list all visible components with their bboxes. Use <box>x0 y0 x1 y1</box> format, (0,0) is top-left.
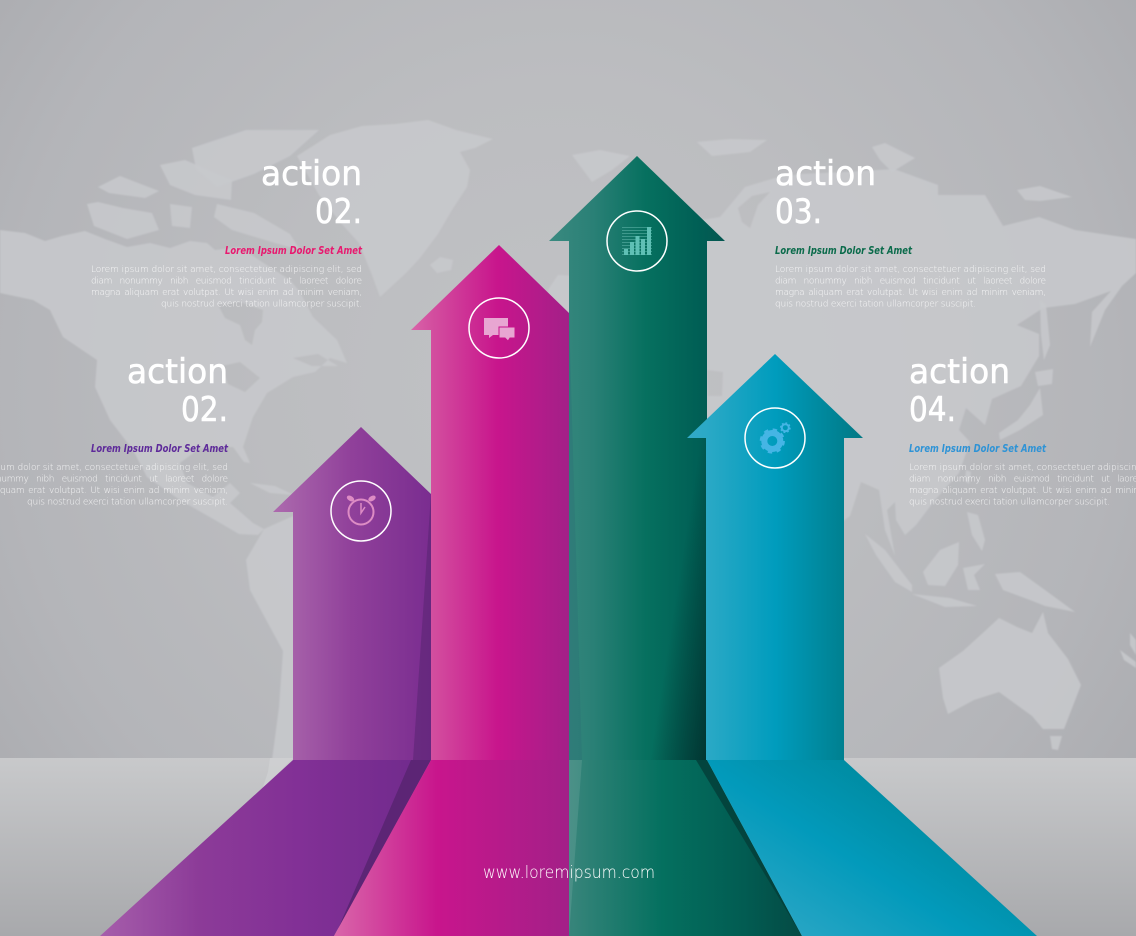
subtitle: Lorem Ipsum Dolor Set Amet <box>909 443 1047 455</box>
heading: action <box>261 154 362 193</box>
icon: alarm clock in circle <box>331 481 391 541</box>
Borneo <box>923 542 959 586</box>
text block: action 02 lower <box>0 352 229 508</box>
Sulawesi <box>963 564 985 590</box>
Philippines <box>967 512 985 551</box>
body text: diam nonummy nibh euismod tincidunt ut laoreet dolore <box>91 276 362 286</box>
teal left shade on wall <box>569 313 582 760</box>
body text: quis nostrud exerci tation ullamcorper suscipit. <box>909 498 1110 508</box>
arrow 2: magenta <box>334 245 569 936</box>
body text: Lorem ipsum dolor sit amet, consectetuer adipiscing elit, sed <box>91 265 362 275</box>
purple shadow on floor <box>335 760 431 936</box>
subtitle: Lorem Ipsum Dolor Set Amet <box>775 245 913 257</box>
Victoria Island <box>87 202 159 239</box>
text block: action 04 <box>909 352 1136 508</box>
body text: quis nostrud exerci tation ullamcorper suscipit. <box>161 300 362 310</box>
arrow 3: teal <box>549 156 802 936</box>
icon: chat bubbles in circle <box>469 298 529 358</box>
Taiwan <box>965 470 971 484</box>
magenta shaft and head <box>411 245 569 760</box>
Europe fragment <box>548 275 640 500</box>
number: 02. <box>315 192 362 231</box>
body text: diam nonummy nibh euismod tincidunt ut laoreet dolore <box>775 276 1046 286</box>
subtitle: Lorem Ipsum Dolor Set Amet <box>225 245 363 257</box>
body text <box>0 463 228 508</box>
text block: action 02 upper <box>91 154 363 310</box>
Java <box>912 594 977 607</box>
body text <box>775 265 1046 310</box>
Svalbard <box>572 150 630 182</box>
magenta floor band <box>334 760 569 936</box>
purple floor band <box>100 760 431 936</box>
Sakhalin and Kuril islands <box>1040 300 1050 360</box>
heading: action <box>909 352 1010 391</box>
Tasmania <box>1050 736 1062 750</box>
arrow 4: blue <box>687 354 1037 936</box>
body text <box>91 265 362 310</box>
teal right shadow on floor <box>696 760 802 936</box>
teal shaft and head <box>549 156 725 760</box>
Arctic islands <box>160 160 232 228</box>
Arctic archipelagos <box>697 139 1072 201</box>
text block: action 03 <box>775 154 1046 310</box>
world map <box>0 120 1136 760</box>
Banks Island <box>98 176 159 198</box>
Sumatra <box>865 534 912 592</box>
icon: gears in circle <box>745 408 805 468</box>
icon: bar chart in circle <box>607 211 667 271</box>
Eurasia <box>640 169 1136 556</box>
blue shaft and head <box>687 354 863 760</box>
Iceland <box>430 257 453 273</box>
floor reflection of map <box>262 758 293 790</box>
floor <box>0 758 1136 936</box>
South America <box>246 516 340 760</box>
body text: quis nostrud exerci tation ullamcorper suscipit. <box>27 498 228 508</box>
website url: www.loremipsum.com <box>483 863 655 883</box>
Ellesmere Island <box>192 130 319 187</box>
teal floor band <box>569 760 802 936</box>
Greenland <box>297 120 493 297</box>
Cuba and Hispaniola <box>250 483 308 504</box>
teal left highlight on floor <box>569 760 582 936</box>
heading: action <box>127 352 228 391</box>
body text: Lorem ipsum dolor sit amet, consectetuer adipiscing elit, sed <box>775 265 1046 275</box>
body text <box>909 463 1136 508</box>
body text: magna aliquam erat volutpat. Ut wisi enim ad minim veniam, <box>775 288 1046 298</box>
teal right shadow on wall <box>650 400 707 760</box>
Baffin Island <box>214 204 300 250</box>
body text: magna aliquam erat volutpat. Ut wisi enim ad minim veniam, <box>91 288 362 298</box>
Australia <box>939 612 1081 729</box>
North America <box>0 230 347 535</box>
Japan <box>999 388 1043 440</box>
heading: action <box>775 154 876 193</box>
New Guinea <box>995 572 1075 612</box>
New Zealand <box>1120 633 1136 668</box>
purple shadow on wall <box>413 494 431 760</box>
subtitle: Lorem Ipsum Dolor Set Amet <box>91 443 229 455</box>
number: 04. <box>909 390 956 429</box>
arrow 1: purple <box>100 427 431 936</box>
number: 03. <box>775 192 822 231</box>
purple shaft and head <box>273 427 431 760</box>
Hokkaido <box>1035 369 1053 386</box>
body text: quis nostrud exerci tation ullamcorper suscipit. <box>775 300 976 310</box>
number: 02. <box>181 390 228 429</box>
blue floor band <box>707 760 1037 936</box>
